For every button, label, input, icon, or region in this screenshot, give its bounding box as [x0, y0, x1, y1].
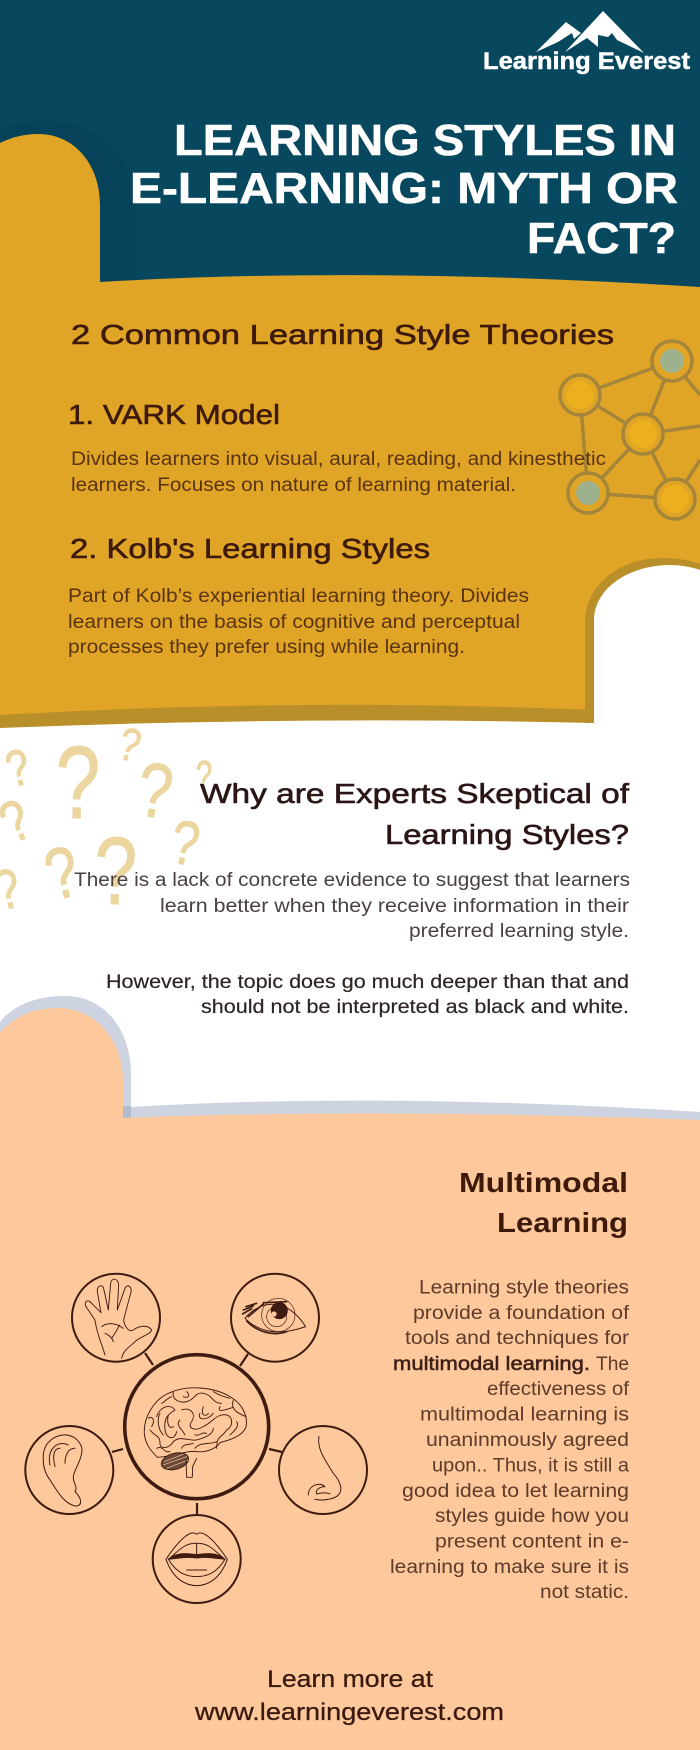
- heading: multimodal learning: [459, 1167, 628, 1238]
- icon: mouth: [166, 1533, 227, 1586]
- icon: question marks: ?: [196, 752, 212, 799]
- text: lack of evidence: There is a lack of concrete evidence to suggest that learners: [74, 870, 630, 891]
- icon: question marks: ?: [95, 818, 137, 925]
- heading: multimodal learning: Learning: [497, 1207, 628, 1238]
- icon: question marks: ?: [56, 724, 100, 840]
- logo: Learning Everest: [483, 11, 690, 75]
- panel: gold theories background: [0, 134, 700, 760]
- heading: Kolb: 2. Kolb's Learning Styles: [70, 533, 430, 564]
- icon: ear: [43, 1435, 82, 1506]
- logo wordmark: Learning Everest: [483, 48, 690, 75]
- text: VARK description: Divides learners into visual, aural, reading, and kinesthetic: [71, 449, 606, 470]
- text: lack of evidence: [74, 870, 630, 942]
- text: lack of evidence: preferred learning style.: [409, 921, 629, 942]
- text: multimodal description: present content in e-: [435, 1532, 629, 1553]
- title: LEARNING STYLES IN: [174, 116, 676, 165]
- footer: learn more: Learn more at: [267, 1666, 433, 1693]
- text: multimodal description: tools and techniques for: [405, 1328, 630, 1349]
- text: multimodal description: [390, 1278, 630, 1603]
- heading: experts skeptical: [200, 778, 629, 850]
- icon: brain: [144, 1388, 246, 1477]
- circle: ear: [25, 1426, 113, 1514]
- circle: eye: [231, 1274, 319, 1362]
- icon: question marks: [0, 717, 212, 925]
- heading: experts skeptical: Learning Styles?: [385, 819, 629, 850]
- text: multimodal description: multimodal learning.: [393, 1354, 590, 1375]
- text: Kolb description: learners on the basis of cognitive and perceptual: [68, 612, 520, 633]
- icon: question marks: ?: [133, 746, 177, 836]
- text: multimodal description: effectiveness of: [487, 1379, 630, 1400]
- icon: question marks: ?: [166, 806, 204, 879]
- text: Kolb description: processes they prefer using while learning.: [68, 637, 465, 658]
- footer: learn more: [194, 1666, 504, 1726]
- text: multimodal description: Learning style theories: [419, 1278, 629, 1298]
- circle: mouth: [153, 1515, 241, 1603]
- text: Kolb description: [68, 586, 529, 658]
- icon: hand: [85, 1279, 152, 1358]
- panel: peach multimodal background: [0, 996, 700, 1750]
- icon: question marks: ?: [0, 737, 36, 798]
- text: however: [106, 972, 629, 1018]
- text: however: However, the topic does go much deeper than that and: [106, 972, 629, 993]
- heading: experts skeptical: Why are Experts Skeptical of: [200, 778, 629, 809]
- text: multimodal description: styles guide how you: [435, 1506, 629, 1527]
- text: multimodal description: The: [596, 1354, 629, 1375]
- text: however: should not be interpreted as black and white.: [201, 997, 629, 1018]
- title: [130, 116, 678, 263]
- icon: eye: [243, 1298, 306, 1334]
- text: lack of evidence: learn better when they receive information in their: [160, 896, 630, 917]
- text: multimodal description: learning to make sure it is: [390, 1557, 629, 1578]
- text: Kolb description: Part of Kolb’s experiential learning theory. Divides: [68, 586, 529, 607]
- icon: question marks: ?: [37, 830, 87, 916]
- icon: question marks: ?: [114, 717, 146, 772]
- icon: mountain: [536, 11, 644, 53]
- text: multimodal description: not static.: [540, 1582, 629, 1603]
- text: multimodal description: good idea to let learning: [402, 1481, 629, 1502]
- title: E-LEARNING: MYTH OR: [130, 164, 678, 213]
- panel: navy header background: [0, 0, 700, 300]
- text: multimodal description: unaninmously agreed: [426, 1430, 629, 1451]
- text: multimodal description: provide a foundation of: [413, 1303, 630, 1324]
- circle: hand: [72, 1274, 160, 1362]
- heading: VARK model: 1. VARK Model: [68, 399, 280, 430]
- title: FACT?: [527, 214, 676, 263]
- text: multimodal description: upon.. Thus, it is still a: [432, 1456, 629, 1476]
- footer: learn more: www.learningeverest.com: [194, 1699, 504, 1726]
- circle: nose: [279, 1426, 367, 1514]
- diagram: senses around brain: [25, 1274, 367, 1603]
- text: multimodal description: multimodal learning is: [420, 1405, 629, 1426]
- icon: nose: [308, 1437, 341, 1500]
- text: VARK description: [71, 449, 606, 496]
- heading: multimodal learning: Multimodal: [459, 1167, 628, 1198]
- heading: theories: 2 Common Learning Style Theories: [71, 319, 614, 350]
- connectors: [112, 1353, 282, 1515]
- icon: network of nodes: [560, 341, 700, 519]
- text: VARK description: learners. Focuses on nature of learning material.: [71, 475, 516, 496]
- circle: brain: [125, 1355, 269, 1499]
